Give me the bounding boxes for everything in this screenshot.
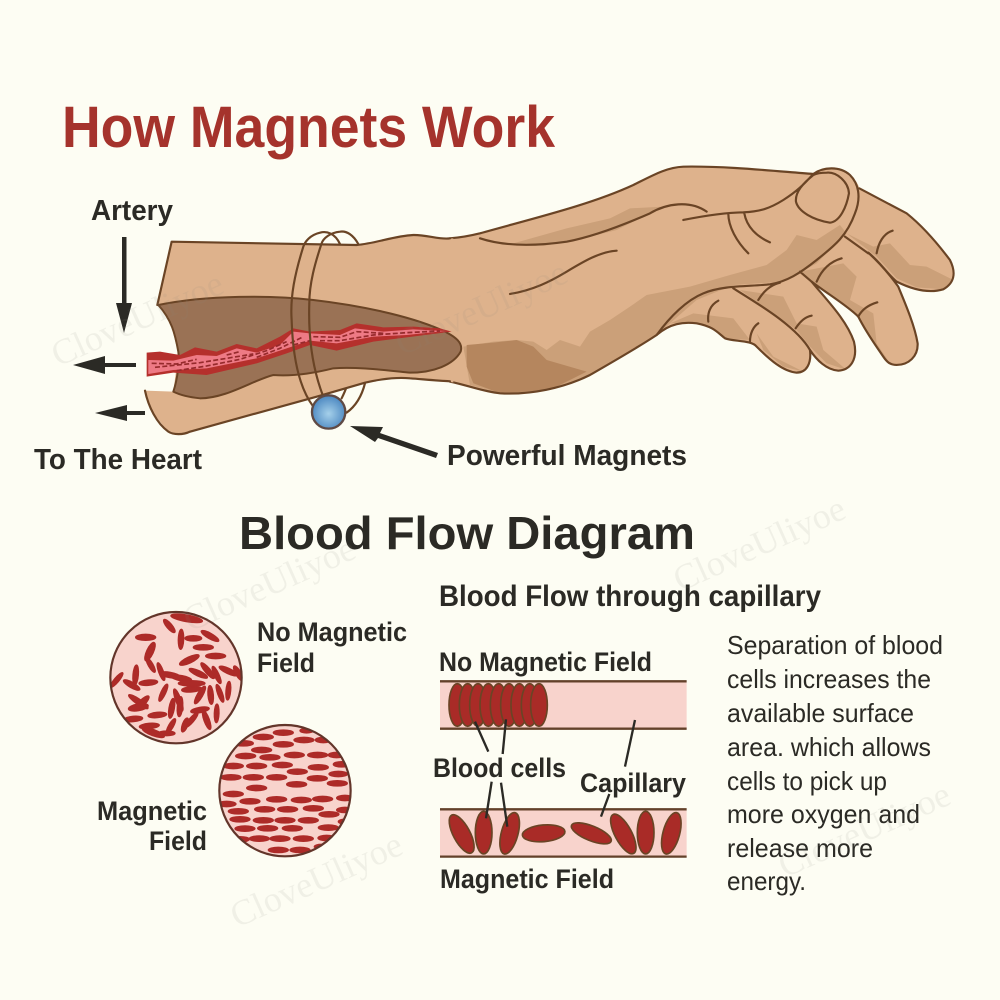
watermarks: CloveUliyoe [224, 824, 408, 935]
icon: blue magnet [312, 395, 345, 429]
label: powerful magnets: Powerful Magnets [447, 440, 687, 472]
arrow: magnet [350, 426, 438, 458]
explanation paragraph: energy. [727, 866, 806, 896]
illustration: wrist and hand with magnet bracelet [145, 167, 954, 435]
bracelet back arcs [342, 383, 365, 413]
explanation paragraph: cells to pick up [727, 766, 887, 796]
capillary: no magnetic field [440, 681, 687, 729]
arrow: blood flow upper [73, 356, 136, 374]
watermarks: CloveUliyoe [667, 488, 851, 599]
watermarks: CloveUliyoe [177, 528, 361, 639]
label: no magnetic field capillary: No Magnetic Field [439, 647, 652, 677]
explanation paragraph: available surface [727, 698, 914, 728]
leader lines: blood cells and capillary [475, 719, 635, 827]
label: blood cells: Blood cells [433, 753, 566, 783]
circle: no magnetic field scattered cells [109, 612, 245, 743]
label: to the heart: To The Heart [34, 444, 202, 476]
explanation paragraph: area. which allows [727, 732, 931, 762]
heading: blood flow diagram: Blood Flow Diagram [239, 507, 695, 559]
subheading: blood flow through capillary: Blood Flow through capillary [439, 580, 821, 613]
watermarks: CloveUliyoe [45, 263, 229, 374]
explanation paragraph: more oxygen and [727, 799, 920, 829]
label: no magnetic field circle: No Magnetic [257, 617, 407, 647]
explanation paragraph: release more [727, 833, 873, 863]
cutaway tissue [158, 297, 461, 398]
label: no magnetic field circle: Field [257, 648, 315, 678]
forearm with cutaway [145, 232, 461, 435]
hand shading [463, 207, 953, 393]
watermarks: CloveUliyoe [772, 774, 956, 885]
explanation paragraph: Separation of blood [727, 630, 943, 660]
hand [443, 167, 954, 394]
title: How Magnets Work [62, 95, 556, 160]
label: capillary: Capillary [580, 768, 686, 798]
arrow: blood flow lower [95, 405, 145, 421]
circle: magnetic field aligned cells [217, 725, 355, 856]
thumb and creases [480, 168, 893, 350]
watermarks [45, 252, 956, 935]
watermarks: CloveUliyoe [389, 252, 573, 363]
label: magnetic field circle: Magnetic [97, 796, 207, 826]
label: artery: Artery [91, 195, 173, 227]
label: magnetic field circle: Field [149, 826, 207, 856]
artery [147, 323, 452, 377]
bracelet front [291, 232, 358, 407]
capillary: magnetic field [440, 809, 687, 857]
forearm outline [145, 235, 450, 434]
hand outline [450, 167, 954, 394]
arrow: artery [116, 237, 132, 333]
explanation paragraph: cells increases the [727, 664, 931, 694]
label: magnetic field capillary: Magnetic Field [440, 864, 614, 894]
